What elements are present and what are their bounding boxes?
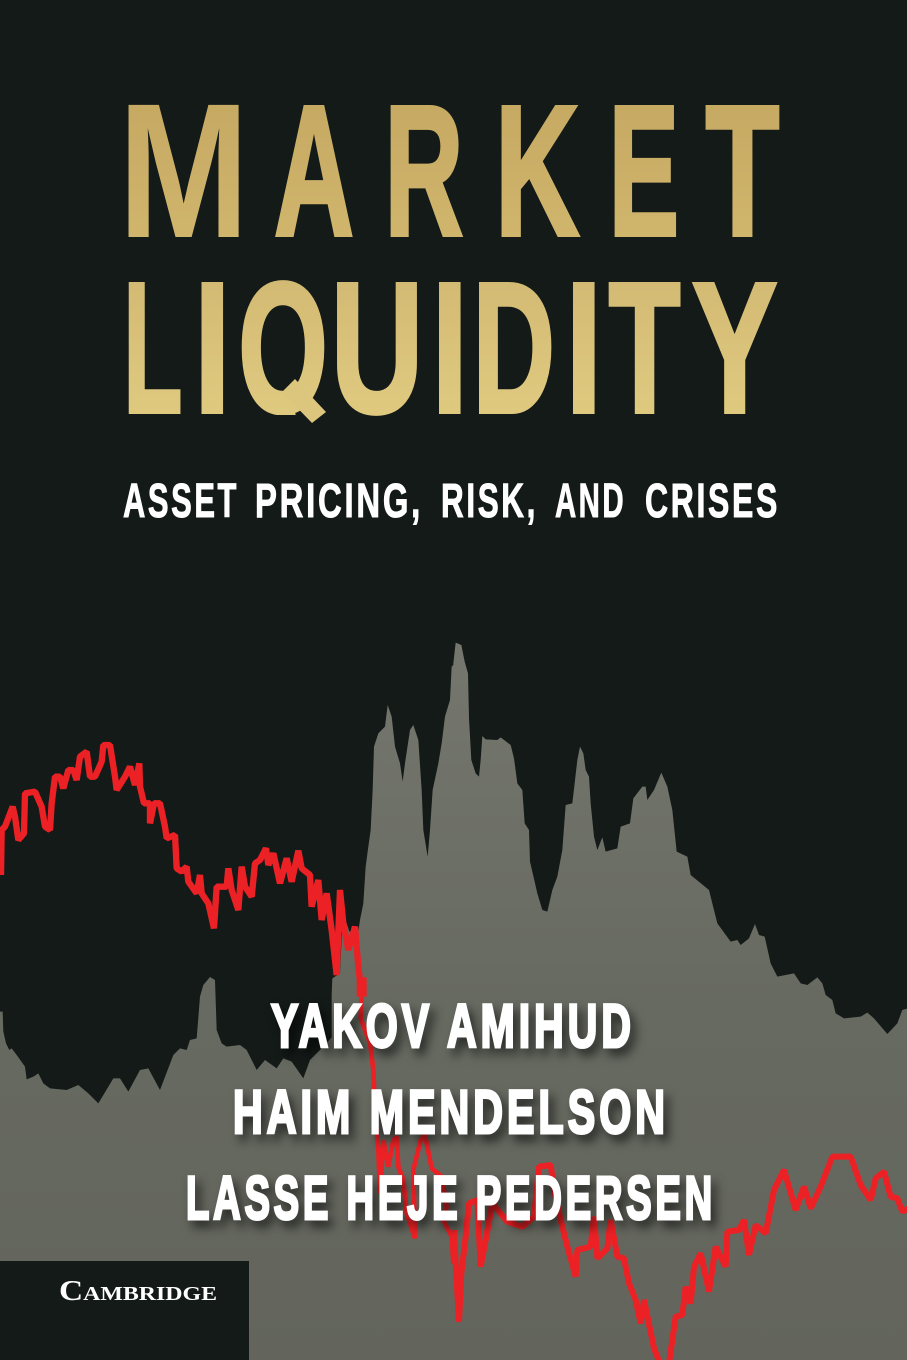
- title: MARKET: A: [274, 67, 354, 275]
- subtitle: PRICING,: [255, 475, 423, 528]
- title: LIQUIDITY: T: [609, 244, 681, 451]
- subtitle: ASSET: [123, 475, 239, 528]
- title: LIQUIDITY: Y: [692, 244, 777, 452]
- publisher name: CAMBRIDGE: [59, 1276, 217, 1307]
- title: LIQUIDITY: I: [432, 245, 468, 453]
- title: MARKET: K: [495, 66, 579, 275]
- title: MARKET: R: [384, 68, 463, 275]
- grey area chart: [0, 643, 907, 1360]
- title: LIQUIDITY: U: [331, 243, 423, 452]
- red price line: [1, 745, 907, 1360]
- publisher block: [0, 1261, 249, 1360]
- title: LIQUIDITY: L: [123, 245, 182, 452]
- author: Yakov Amihud: YAKOV AMIHUD: [271, 992, 635, 1060]
- subtitle: CRISES: [645, 475, 780, 528]
- subtitle: [123, 475, 780, 528]
- title: MARKET: M: [118, 64, 249, 279]
- title: MARKET: T: [706, 68, 779, 275]
- title: LIQUIDITY: Q: [238, 244, 328, 452]
- author: Haim Mendelson: HAIM MENDELSON: [233, 1078, 669, 1146]
- title: LIQUIDITY: I: [194, 245, 230, 453]
- subtitle: RISK,: [441, 475, 538, 528]
- title: LIQUIDITY: D: [473, 243, 555, 452]
- title: LIQUIDITY: [128, 280, 778, 423]
- authors: [186, 992, 716, 1232]
- title: MARKET: E: [609, 68, 679, 276]
- title: MARKET: [118, 64, 779, 279]
- subtitle: AND: [555, 475, 626, 528]
- title: LIQUIDITY: I: [566, 245, 602, 453]
